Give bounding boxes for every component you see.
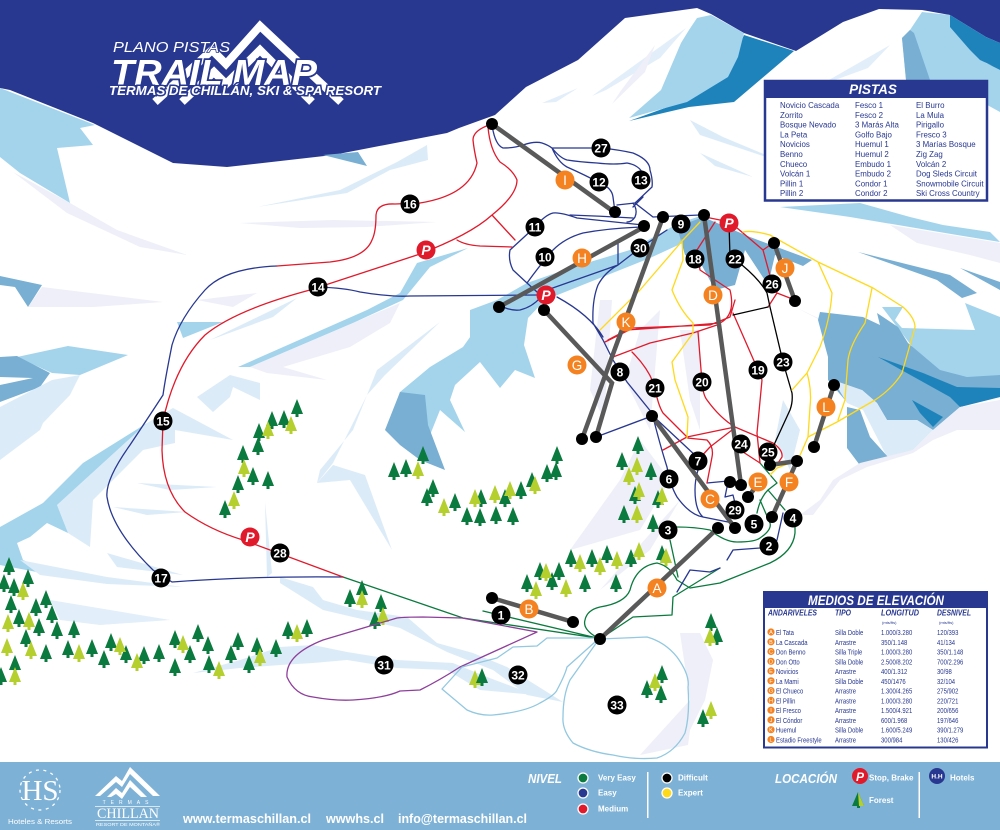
parking and stop markers: P bbox=[541, 287, 551, 303]
lift letter markers: H bbox=[577, 251, 587, 266]
lift types bbox=[835, 629, 863, 745]
trail number markers: 24 bbox=[734, 438, 748, 452]
legend: nivel bbox=[528, 771, 708, 818]
trail number markers: 25 bbox=[761, 446, 775, 460]
central slope streaks bbox=[177, 248, 468, 550]
trail number markers: 7 bbox=[695, 454, 702, 468]
lift letter bullets: C bbox=[769, 650, 773, 656]
lift names: El Cóndor bbox=[776, 717, 803, 725]
trail number markers: 28 bbox=[273, 546, 287, 560]
legend: locacion: Stop, Brake bbox=[869, 774, 914, 782]
lift lengths: 2.500/8.202 bbox=[881, 659, 912, 667]
trail number markers: 1 bbox=[498, 608, 505, 622]
pistas column three: Fresco 3 bbox=[916, 130, 947, 139]
lift types: Silla Doble bbox=[835, 727, 863, 735]
column headers: LONGITUD bbox=[881, 608, 919, 618]
lift vertical drops: 41/134 bbox=[937, 639, 955, 647]
lift letter markers: G bbox=[572, 358, 582, 373]
lift names: Novicios bbox=[776, 668, 799, 676]
lift letter bullets: K bbox=[769, 728, 773, 734]
lift lengths: 1.500/4.921 bbox=[881, 708, 912, 715]
legend: nivel: Expert bbox=[678, 788, 703, 798]
lift letter bullets: B bbox=[769, 640, 773, 646]
pistas column two bbox=[855, 101, 899, 198]
pistas column one: Bosque Nevado bbox=[780, 121, 837, 130]
legend: locacion: P bbox=[856, 770, 865, 784]
lift types: Silla Doble bbox=[835, 659, 863, 667]
lift letter markers: I bbox=[563, 173, 567, 188]
logo: termas chillan: CHILLAN bbox=[97, 806, 160, 822]
very easy trails: green bbox=[343, 463, 795, 639]
legend: nivel: Very Easy bbox=[598, 774, 636, 782]
column headers: ANDARIVELES bbox=[767, 608, 817, 618]
lift types: Arrastre bbox=[835, 639, 856, 647]
website addresses bbox=[182, 811, 527, 826]
pistas column two: Condor 2 bbox=[855, 189, 887, 198]
pistas column one: Zorrito bbox=[780, 111, 803, 120]
website addresses: www.termaschillan.cl bbox=[182, 811, 311, 826]
panel: medios de elevacion table bbox=[763, 591, 988, 748]
lift names: Don Otto bbox=[776, 659, 800, 667]
lift letter markers: F bbox=[785, 475, 793, 490]
lift vertical drops: 350/1.148 bbox=[937, 649, 963, 657]
trail number markers: 9 bbox=[678, 218, 685, 232]
main title: trail map: TRAIL MAP bbox=[111, 52, 318, 93]
parking and stop markers bbox=[240, 214, 738, 546]
resort name: TERMAS DE CHILLÁN, SKI & SPA RESORT bbox=[109, 83, 382, 98]
trail number markers: 15 bbox=[156, 414, 170, 428]
medium trails: red bbox=[162, 124, 795, 577]
trail number markers: 29 bbox=[728, 504, 742, 518]
lift letter markers: K bbox=[621, 315, 631, 330]
pistas column one: Pillin 1 bbox=[780, 179, 803, 188]
trail number markers: 30 bbox=[633, 242, 647, 256]
lift letter markers bbox=[520, 170, 836, 618]
pistas column three: 3 Marías Bosque bbox=[916, 140, 976, 149]
pistas column three bbox=[916, 101, 984, 198]
ski trails bbox=[107, 124, 915, 759]
peak two shadow bbox=[690, 12, 1000, 177]
lift letter bullets: J bbox=[770, 718, 773, 724]
left flank shadow bbox=[0, 276, 272, 625]
pistas column two: Huemul 1 bbox=[855, 140, 889, 149]
lift types: Silla Doble bbox=[835, 678, 863, 686]
title block bbox=[109, 26, 382, 102]
logo: termas chillan: RESORT DE MONTAÑA® bbox=[96, 822, 161, 827]
easy trails: blue bbox=[107, 125, 783, 592]
column headers bbox=[767, 608, 971, 618]
legend: locacion bbox=[775, 768, 975, 818]
forest trees bbox=[0, 399, 723, 727]
lift types: Arrastre bbox=[835, 688, 856, 696]
lift H bbox=[493, 220, 650, 313]
lift types: Arrastre bbox=[835, 708, 856, 715]
lift letter bullets: F bbox=[769, 679, 773, 685]
lift letter markers: C bbox=[705, 492, 715, 507]
lift lengths: 1.000/3.280 bbox=[881, 629, 912, 637]
lift lengths: 1.000/3.280 bbox=[881, 698, 912, 706]
lift letter markers: L bbox=[822, 400, 830, 415]
parking and stop markers: P bbox=[421, 242, 431, 258]
lift letter markers: E bbox=[753, 475, 763, 490]
lift types: Arrastre bbox=[835, 698, 856, 706]
lift names: El Tata bbox=[776, 629, 794, 637]
column headers: TIPO bbox=[835, 608, 852, 618]
lift lengths: 600/1.968 bbox=[881, 717, 907, 725]
pistas column two: Huemul 2 bbox=[855, 150, 889, 159]
pistas column two: Fesco 1 bbox=[855, 101, 883, 110]
lift letter markers: A bbox=[652, 581, 662, 596]
logo: hoteles and resorts bbox=[8, 770, 72, 826]
upper left shadow bbox=[0, 88, 437, 255]
lift D bbox=[698, 209, 747, 491]
lift letter markers: B bbox=[524, 602, 534, 617]
table heading: MEDIOS DE ELEVACIÓN bbox=[808, 593, 944, 608]
lift F bbox=[764, 455, 803, 523]
peak one shadow bbox=[542, 15, 794, 121]
pistas column one: Chueco bbox=[780, 160, 808, 169]
lift vertical drops: 200/656 bbox=[937, 708, 959, 715]
legend: nivel: Easy bbox=[598, 788, 617, 798]
difficult trails: black bbox=[729, 223, 792, 447]
trail number markers: 12 bbox=[592, 176, 606, 190]
pistas column one: Volcán 1 bbox=[780, 170, 810, 179]
pistas column one: Pillin 2 bbox=[780, 189, 803, 198]
legend: locacion: Hotels bbox=[950, 774, 975, 782]
trail number markers: 11 bbox=[529, 220, 542, 234]
ski lifts bbox=[486, 118, 840, 645]
lift names: Estadio Freestyle bbox=[776, 737, 822, 745]
lift vertical drops: 390/1.279 bbox=[937, 727, 963, 735]
logo: hoteles and resorts: HS bbox=[21, 775, 59, 807]
lift vertical drops: 197/646 bbox=[937, 717, 959, 725]
lift vertical drops: 700/2.296 bbox=[937, 659, 963, 667]
lift names: El Chueco bbox=[776, 688, 803, 696]
logo: termas chillan bbox=[95, 767, 161, 827]
pistas column two: Golfo Bajo bbox=[855, 130, 892, 139]
right flank shadow bbox=[780, 203, 1000, 515]
lift G bbox=[538, 304, 612, 443]
legend: nivel: Medium bbox=[598, 804, 628, 814]
pistas column two: Condor 1 bbox=[855, 179, 887, 188]
lift letter bullets: L bbox=[769, 738, 773, 744]
lift letter bullets: D bbox=[769, 659, 773, 665]
lift vertical drops: 32/104 bbox=[937, 678, 955, 686]
lift C bbox=[646, 410, 741, 534]
resort mountain emblem bbox=[155, 26, 341, 102]
pistas column three: Ski Cross Country bbox=[916, 189, 980, 198]
pistas column two: Fesco 2 bbox=[855, 111, 883, 120]
panel: pistas list bbox=[764, 80, 988, 200]
trail number markers: 22 bbox=[728, 252, 742, 266]
lift vertical drops bbox=[937, 629, 963, 745]
lift types: Arrastre bbox=[835, 717, 856, 725]
lift vertical drops: 220/721 bbox=[937, 698, 959, 706]
trail number markers: 17 bbox=[154, 572, 168, 586]
lift A bbox=[594, 522, 724, 645]
legend: nivel: NIVEL bbox=[528, 771, 562, 786]
pistas column three: Volcán 2 bbox=[916, 160, 946, 169]
trail number markers: 13 bbox=[634, 174, 648, 188]
lift J bbox=[768, 237, 801, 307]
lift names: El Fresco bbox=[776, 708, 801, 715]
pistas column one: Novicio Cascada bbox=[780, 101, 840, 110]
lift letter bullets: H bbox=[769, 698, 773, 704]
lift types: Silla Doble bbox=[835, 629, 863, 637]
trail number markers: 4 bbox=[790, 512, 797, 526]
lower slope streaks bbox=[193, 440, 713, 755]
parking and stop markers: P bbox=[724, 215, 734, 231]
lift lengths: 350/1.148 bbox=[881, 639, 907, 647]
lift letter bullets: I bbox=[770, 708, 772, 714]
trail number markers: 14 bbox=[311, 280, 325, 294]
lift names: Don Benno bbox=[776, 649, 806, 657]
lift types: Arrastre bbox=[835, 668, 856, 676]
lift E bbox=[724, 476, 758, 503]
lift K bbox=[576, 211, 669, 445]
trail number markers: 19 bbox=[751, 364, 765, 378]
dog sled and cross country circuits: light blue bbox=[442, 637, 689, 759]
lift letter bullets bbox=[767, 628, 775, 744]
trail number markers: 18 bbox=[688, 252, 702, 266]
trail number markers: 23 bbox=[776, 356, 790, 370]
expert trails: yellow bbox=[600, 222, 915, 475]
trail number markers: 33 bbox=[610, 698, 624, 712]
trail number markers bbox=[152, 138, 802, 714]
trail number markers: 6 bbox=[666, 472, 673, 486]
snowmobile circuit: purple bbox=[287, 617, 537, 700]
trail number markers: 21 bbox=[648, 382, 662, 396]
unit labels: (mts/fts) bbox=[882, 620, 897, 625]
lift I bbox=[486, 118, 621, 218]
lift lengths: 1.300/4.265 bbox=[881, 688, 912, 696]
pistas column three: Zig Zag bbox=[916, 150, 943, 159]
lift vertical drops: 30/98 bbox=[937, 668, 952, 676]
parking and stop markers: P bbox=[245, 529, 255, 545]
lift names: El Pillin bbox=[776, 698, 796, 706]
pistas heading: PISTAS bbox=[849, 82, 897, 97]
lift lengths: 300/984 bbox=[881, 737, 903, 745]
trail number markers: 2 bbox=[766, 540, 773, 554]
pistas column two: 3 Marás Alta bbox=[855, 121, 899, 130]
legend: locacion: LOCACIÓN bbox=[775, 771, 838, 786]
pistas column three: El Burro bbox=[916, 101, 945, 110]
column headers: DESNIVEL bbox=[937, 608, 971, 618]
pistas column one: Benno bbox=[780, 150, 803, 159]
lift B bbox=[486, 592, 579, 628]
trail number markers: 16 bbox=[403, 198, 417, 212]
trail number markers: 27 bbox=[594, 142, 608, 156]
unit labels: (mts/fts) bbox=[939, 620, 954, 625]
legend: nivel: Difficult bbox=[678, 774, 708, 782]
trail number markers: 10 bbox=[538, 250, 552, 264]
pistas column two: Embudo 2 bbox=[855, 170, 891, 179]
lift L bbox=[808, 379, 840, 453]
lift lengths bbox=[881, 629, 912, 745]
footer band bbox=[0, 762, 1000, 830]
lift letter markers: J bbox=[782, 261, 788, 276]
trail number markers: 26 bbox=[765, 278, 779, 292]
legend: locacion: H.H bbox=[931, 774, 943, 780]
trail number markers: 20 bbox=[695, 376, 709, 390]
lift letter bullets: E bbox=[769, 669, 773, 675]
lift letter bullets: G bbox=[769, 689, 773, 695]
lift names: La Cascada bbox=[776, 639, 808, 647]
subtitle: plano pistas: PLANO PISTAS bbox=[113, 39, 230, 56]
lift vertical drops: 120/393 bbox=[937, 629, 959, 637]
website addresses: wwwhs.cl bbox=[325, 811, 384, 826]
lift names: Huemul bbox=[776, 727, 797, 735]
lift types: Arrastre bbox=[835, 737, 856, 745]
pistas column two: Embudo 1 bbox=[855, 160, 891, 169]
logo: hoteles and resorts: Hoteles & Resorts bbox=[8, 817, 72, 826]
website addresses: info@termaschillan.cl bbox=[398, 811, 527, 826]
lift letter bullets: A bbox=[769, 630, 773, 636]
lift lengths: 1.600/5.249 bbox=[881, 727, 912, 735]
lift letter markers: D bbox=[708, 288, 718, 303]
pistas column three: Pirigallo bbox=[916, 121, 945, 130]
lift types: Silla Triple bbox=[835, 649, 862, 657]
pistas column one: Novicios bbox=[780, 140, 810, 149]
lift lengths: 400/1.312 bbox=[881, 668, 907, 676]
trail number markers: 3 bbox=[665, 524, 672, 538]
pistas column three: Snowmobile Circuit bbox=[916, 179, 984, 188]
logo: termas chillan: TERMAS bbox=[103, 800, 153, 806]
lift vertical drops: 130/426 bbox=[937, 737, 959, 745]
legend: locacion: Forest bbox=[869, 796, 894, 805]
trail number markers: 8 bbox=[617, 366, 624, 380]
trail number markers: 32 bbox=[511, 668, 525, 682]
pistas column one: La Peta bbox=[780, 130, 808, 139]
trail number markers: 5 bbox=[751, 518, 758, 532]
lift lengths: 1.000/3.280 bbox=[881, 649, 912, 657]
trail number markers: 31 bbox=[377, 658, 391, 672]
pistas column three: Dog Sleds Circuit bbox=[916, 170, 978, 179]
pistas column three: La Mula bbox=[916, 111, 945, 120]
lift names bbox=[776, 629, 822, 745]
lift vertical drops: 275/902 bbox=[937, 688, 959, 696]
lift lengths: 450/1476 bbox=[881, 678, 906, 686]
unit labels bbox=[882, 620, 954, 625]
central ridge shadow bbox=[385, 215, 853, 470]
pistas column one bbox=[780, 101, 840, 198]
lift names: La Mami bbox=[776, 678, 799, 686]
